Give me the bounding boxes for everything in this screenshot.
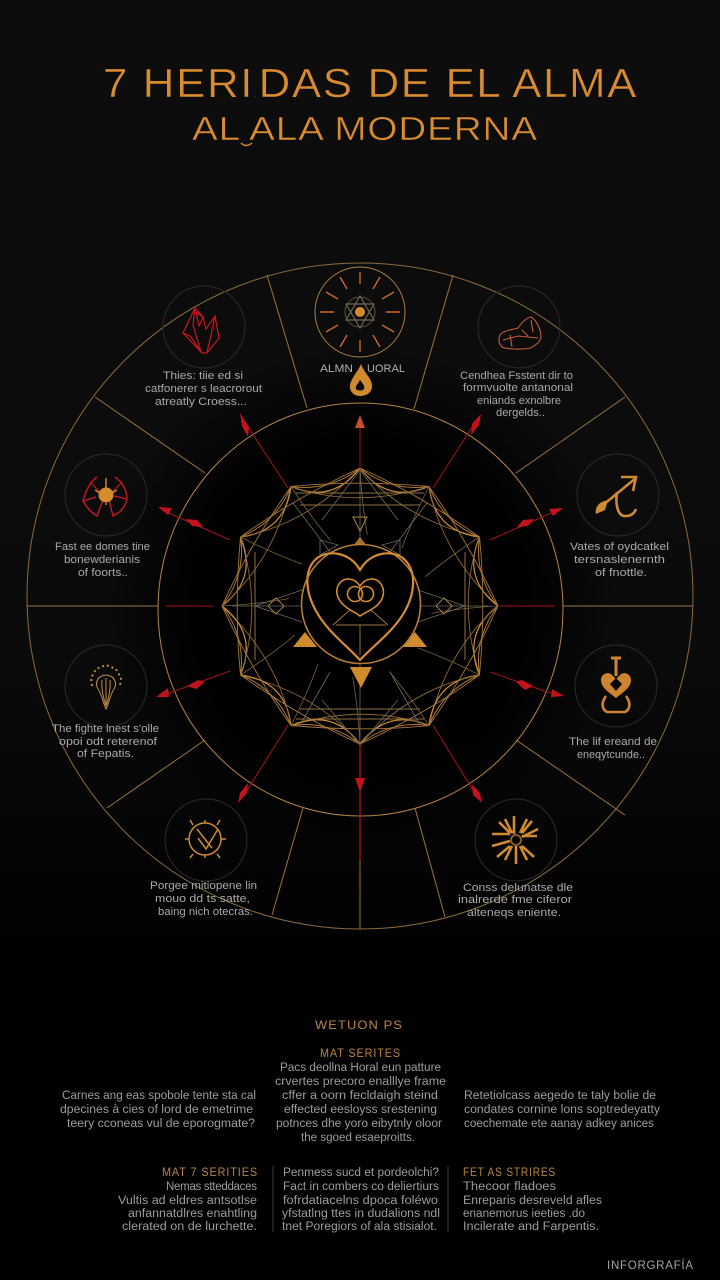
small triangles and diamonds xyxy=(268,517,452,688)
text block: lower center: tnet Poregiors of ala stisialot. xyxy=(282,1221,437,1233)
panel: wound 8 bottom right: alteneqs eniente. xyxy=(467,907,561,919)
panel: wound 5 right: tersnaslenernth xyxy=(574,554,665,566)
text block: upper center: Pacs deollna Horal eun patture xyxy=(280,1062,441,1074)
panel: wound 3 left: Fast ee domes tine xyxy=(55,541,150,553)
panel: wound 3 left xyxy=(55,454,150,579)
text block: upper center: the sgoed esaeproitts. xyxy=(301,1132,415,1144)
panel: wound 7 bottom left: baing nich otecras. xyxy=(158,906,253,918)
panel: wound 2 top right: dergelds.. xyxy=(496,407,545,419)
wheel frame xyxy=(27,263,693,929)
text block: lower right: FET AS STRIRES xyxy=(463,1165,556,1179)
icon: radiant seal xyxy=(315,267,405,357)
panel: wound 8 bottom right xyxy=(458,799,573,919)
text block: upper center: cffer a oorn fecldaigh steind xyxy=(282,1090,438,1102)
text block: upper right xyxy=(464,1090,660,1130)
icon: thorn wheel xyxy=(165,799,247,881)
text block: lower center: yfstatlng ttes in dudalions ndl xyxy=(282,1208,440,1220)
icon: heart flask xyxy=(575,645,657,727)
title: 7 HERI .DAS DE EL ALMA xyxy=(103,60,638,106)
footer label: INFORGRAFÍA xyxy=(607,1259,693,1272)
central mandala xyxy=(181,427,539,785)
panel: wound 4 left lower: of Fepatis. xyxy=(77,748,134,760)
text block: lower left: clerated on de lurchette. xyxy=(122,1221,257,1233)
label xyxy=(320,363,405,375)
text block: upper center: crvertes precoro enalllye frame xyxy=(275,1076,446,1088)
text block: lower left: Nemas stteddaces xyxy=(166,1181,257,1193)
text block: upper left xyxy=(60,1090,256,1130)
panel: wound 2 top right: Cendhea Fsstent dir to xyxy=(460,370,573,382)
text block: upper right: condates cornine lons soptredeyatty xyxy=(464,1104,660,1116)
panel: wound 2 top right: formvuolte antanonal xyxy=(463,382,573,394)
panel: wound 8 bottom right: inalrerde fme ciferor xyxy=(458,894,572,906)
text block: upper center: effected eesloyss srestening xyxy=(284,1104,437,1116)
icon: rock hand xyxy=(478,286,560,368)
text block: lower center: Fact in combers co deliertiurs xyxy=(283,1181,439,1193)
panel: wound 5 right xyxy=(570,454,669,579)
heart emblem xyxy=(302,544,420,664)
text block: lower right: Thecoor fladoes xyxy=(463,1181,556,1193)
icon: red crystal xyxy=(163,286,245,368)
text block: upper right: coechemate ete aanay adkey anices xyxy=(464,1118,654,1130)
icon: bulb xyxy=(65,645,147,727)
panel: wound 8 bottom right: Conss delunatse dle xyxy=(463,882,573,894)
panel: wound 7 bottom left: mouo dd ts satte, xyxy=(155,893,250,905)
heading: bottom section: MAT SERITES xyxy=(320,1046,401,1060)
panel: wound 5 right: Vates of oydcatkel xyxy=(570,541,669,553)
text block: upper center: potnces dhe yoro eibytnly oloor xyxy=(276,1118,442,1130)
panel: wound 4 left lower xyxy=(52,645,159,760)
panel: wound 5 right: of fnottle. xyxy=(595,567,647,579)
label: UORAL xyxy=(367,363,405,375)
text block: lower right xyxy=(463,1165,602,1233)
panel: wound 3 left: bonewderianis xyxy=(64,554,141,566)
panel: wound 2 top right xyxy=(460,286,573,419)
text block: upper right: Retetiolcass aegedo te taly bolie de xyxy=(464,1090,656,1102)
text block: upper left: teery cconeas vul de eporogmate? xyxy=(67,1118,255,1130)
icon: flame xyxy=(350,364,372,396)
panel: wound 4 left lower: opoi odt reterenof xyxy=(59,736,158,748)
panel: wound 1 top left: Thies: tiie ed si xyxy=(163,370,243,382)
text block: lower right: enanemorus ieeties .do xyxy=(463,1208,585,1220)
panel: wound 7 bottom left: Porgee mitiopene lin xyxy=(150,880,257,892)
panel: wound 2 top right: eniands exnolbre xyxy=(477,395,561,407)
panel: wound 1 top left: atreatly Croess... xyxy=(155,396,247,408)
text block: lower right: Enreparis desreveld afles xyxy=(463,1195,602,1207)
text block: lower center xyxy=(273,1166,448,1233)
text block: lower left: Vultis ad eldres antsotlse xyxy=(118,1195,257,1207)
text block: lower center: Penmess sucd et pordeolchi? xyxy=(283,1167,439,1179)
panel: wound 6 right lower xyxy=(569,645,657,761)
panel: wound 1 top left: catfonerer s leacrorout xyxy=(145,383,262,395)
panel: wound 7 bottom left xyxy=(150,799,257,918)
panel: wound 6 right lower: The lif ereand de xyxy=(569,736,657,748)
panel: wound 3 left: of foorts.. xyxy=(78,567,128,579)
icon: red spider sun xyxy=(65,454,147,536)
heading: bottom section xyxy=(315,1018,403,1060)
text block: lower left xyxy=(118,1165,258,1233)
panel: wound 4 left lower: The fighte lnest s'olle xyxy=(52,723,159,735)
text block: upper left: dpecines à cies of lord de emetrime xyxy=(60,1104,253,1116)
text block: lower right: Incilerate and Farpentis. xyxy=(463,1221,599,1233)
panel: top center wound xyxy=(315,267,405,396)
red arrows xyxy=(156,413,564,860)
title xyxy=(103,60,638,148)
text block: lower center: fofrdatiacelns dpoca foléwo xyxy=(283,1195,438,1207)
icon: arrow hook xyxy=(577,454,659,536)
label: ALMN xyxy=(320,363,353,375)
text block: lower left: MAT 7 SERITIES xyxy=(162,1165,258,1179)
text block: lower left: anfannatdlres enahtling xyxy=(128,1208,257,1220)
text block: upper left: Carnes ang eas spobole tente sta cal xyxy=(62,1090,256,1102)
icon: sunburst xyxy=(475,799,557,881)
title: AL ALA MODERNA xyxy=(192,111,538,148)
heading: bottom section: WETUON PS xyxy=(315,1018,403,1032)
panel: wound 1 top left xyxy=(145,286,262,408)
text block: upper center xyxy=(275,1062,446,1144)
panel: wound 6 right lower: eneqytcunde.. xyxy=(577,749,645,761)
